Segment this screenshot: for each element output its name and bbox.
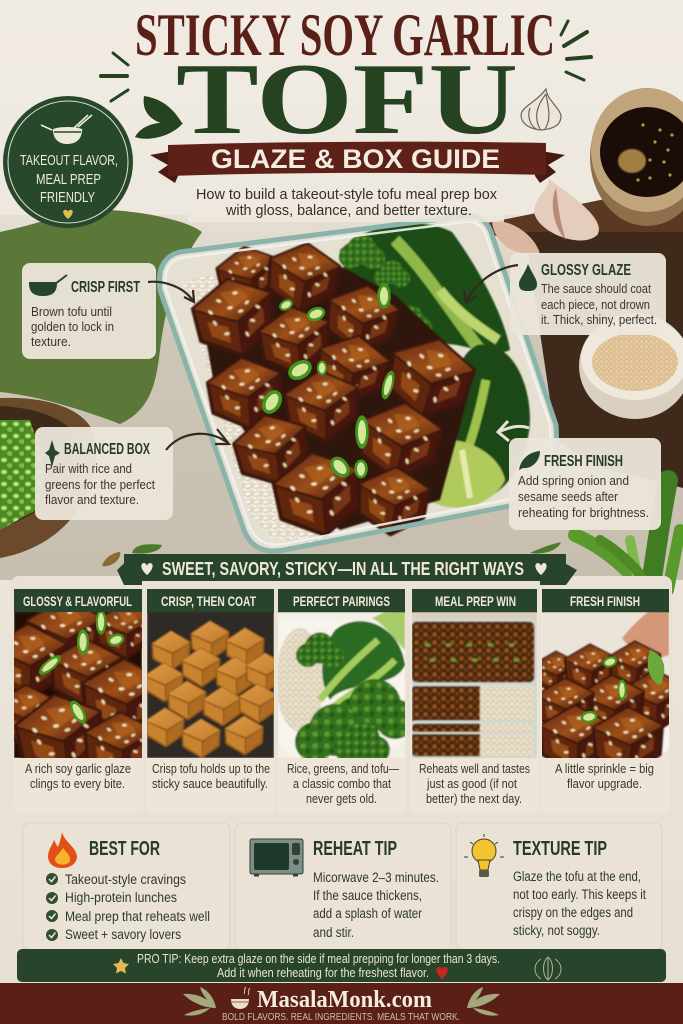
meal prep container	[159, 216, 556, 551]
callout: fresh finish	[509, 438, 661, 530]
callout: glossy glaze	[510, 253, 666, 335]
icon: whisk	[535, 957, 561, 980]
spring onions	[260, 285, 395, 479]
card: crisp then coat	[147, 589, 274, 790]
icon: yellow heart	[63, 210, 73, 219]
icon: red heart	[436, 967, 448, 979]
panel: texture tip: sticky, not soggy.	[513, 923, 600, 938]
icon: drop	[519, 264, 537, 291]
card: perfect pairings: a classic combo that	[293, 776, 391, 791]
panel: reheat tip: and stir.	[313, 925, 354, 940]
card: glossy and flavorful	[14, 589, 142, 790]
footer band: MasalaMonk.com	[257, 987, 432, 1013]
panel: reheat tip: If the sauce thickens,	[313, 888, 422, 903]
callout: fresh finish: sesame seeds after	[518, 489, 619, 504]
card: meal prep win	[410, 589, 538, 812]
arrow: glossy glaze	[464, 265, 518, 302]
checklist: Meal prep that reheats well	[65, 909, 210, 924]
panel: texture tip: not too early. This keeps it	[513, 887, 646, 902]
arrow: balanced box	[166, 429, 229, 450]
callout: crisp first: CRISP FIRST	[71, 279, 140, 296]
card: meal prep win: MEAL PREP WIN	[435, 593, 516, 609]
card: crisp then coat: Crisp tofu holds up to the	[152, 761, 270, 776]
badge: takeout flavor: TAKEOUT FLAVOR,	[20, 153, 118, 169]
photo: sprinkling onions	[542, 612, 669, 758]
card: glossy and flavorful: GLOSSY & FLAVORFUL	[23, 593, 132, 609]
callout: balanced box	[35, 427, 173, 520]
glass rim	[159, 216, 556, 551]
checklist: Sweet + savory lovers	[65, 927, 181, 942]
card: crisp then coat: CRISP, THEN COAT	[161, 593, 256, 609]
checklist: Takeout-style cravings	[65, 872, 186, 887]
card: meal prep win: Reheats well and tastes	[419, 761, 530, 776]
background: wooden board	[472, 188, 683, 488]
callout: crisp first: golden to lock in	[31, 319, 114, 334]
soy sauce bowl	[590, 88, 683, 226]
subtitle: with gloss, balance, and better texture.	[225, 203, 472, 219]
callout: glossy glaze: each piece, not drown	[541, 297, 650, 312]
icon: light bulb	[464, 834, 504, 877]
card: fresh finish: flavor upgrade.	[567, 776, 642, 791]
callout: glossy glaze: The sauce should coat	[541, 281, 651, 296]
callout: glossy glaze: it. Thick, shiny, perfect.	[541, 312, 657, 327]
icon: pan	[30, 275, 67, 295]
icon: microwave	[250, 839, 303, 876]
callout: glossy glaze: GLOSSY GLAZE	[541, 262, 631, 279]
callout: balanced box: flavor and texture.	[45, 492, 139, 507]
icon: sparkle	[45, 440, 60, 467]
callout: fresh finish: Add spring onion and	[518, 473, 629, 488]
container base	[159, 216, 556, 551]
icon: leaf	[519, 451, 540, 470]
ribbon: sweet savory sticky	[117, 554, 577, 585]
icon: bowl with chopsticks	[41, 115, 92, 144]
panel: best for	[23, 823, 230, 950]
badge: takeout flavor	[3, 96, 133, 228]
card: meal prep win: just as good (if not	[426, 776, 517, 791]
callout: crisp first	[22, 263, 156, 359]
background: counter top	[0, 215, 683, 580]
card: perfect pairings	[278, 589, 405, 806]
panel: texture tip: TEXTURE TIP	[513, 838, 607, 860]
pro tip bar	[17, 949, 666, 982]
photo: glazed tofu	[14, 612, 142, 758]
arrow: fresh finish	[498, 421, 529, 441]
checklist: High-protein lunches	[65, 890, 177, 905]
panel: reheat tip: add a splash of water	[313, 906, 422, 921]
panel: reheat tip	[235, 823, 451, 950]
garlic bulbs	[492, 178, 599, 254]
icon: flame	[48, 832, 77, 868]
badge: takeout flavor: MEAL PREP	[36, 172, 101, 188]
rice	[182, 255, 340, 544]
card: meal prep win: better) the next day.	[426, 791, 522, 806]
card: glossy and flavorful: clings to every bite.	[30, 776, 125, 791]
panel: texture tip: Glaze the tofu at the end,	[513, 869, 641, 884]
panel: best for: BEST FOR	[89, 838, 160, 860]
callout: fresh finish: reheating for brightness.	[518, 505, 649, 520]
panel: reheat tip: REHEAT TIP	[313, 838, 397, 860]
callout: fresh finish: FRESH FINISH	[544, 453, 623, 470]
photo: crisp tofu in pan	[145, 612, 284, 758]
pro tip bar: PRO TIP: Keep extra glaze on the side if meal prepping for longer than 3 days.	[137, 951, 500, 966]
callout: crisp first: texture.	[31, 334, 71, 349]
card: fresh finish	[542, 589, 669, 790]
panel: texture tip	[456, 823, 662, 950]
footer band: BOLD FLAVORS. REAL INGREDIENTS. MEALS THAT WORK.	[222, 1012, 460, 1023]
icon: leaf sprig left	[183, 987, 216, 1016]
lower bok choy	[423, 345, 530, 508]
bowl of spring onions	[0, 398, 96, 558]
photo: rice and greens	[278, 612, 405, 758]
card: fresh finish: FRESH FINISH	[570, 593, 640, 609]
upper greens	[339, 223, 510, 353]
callout: crisp first: Brown tofu until	[31, 304, 112, 319]
background: green napkin	[0, 210, 202, 424]
callout: balanced box: Pair with rice and	[45, 461, 132, 476]
footer band	[0, 983, 683, 1024]
card: perfect pairings: never gets old.	[306, 791, 377, 806]
tofu cubes	[190, 240, 478, 540]
callout: balanced box: greens for the perfect	[45, 477, 155, 492]
callout: balanced box: BALANCED BOX	[64, 441, 150, 458]
card: fresh finish: A little sprinkle = big	[555, 761, 654, 776]
photo: stacked containers	[410, 612, 537, 758]
card: crisp then coat: sticky sauce beautifully.	[152, 776, 268, 791]
pro tip bar: Add it when reheating for the freshest flavor.	[217, 965, 429, 980]
sesame bowl	[579, 313, 683, 419]
icon: leaves	[135, 96, 183, 139]
badge: takeout flavor: FRIENDLY	[40, 190, 95, 206]
card: perfect pairings: PERFECT PAIRINGS	[293, 593, 390, 609]
card: glossy and flavorful: A rich soy garlic glaze	[25, 761, 131, 776]
icon: garlic outline	[521, 89, 561, 130]
ribbon: sweet savory sticky: SWEET, SAVORY, STICKY—IN ALL THE RIGHT WAYS	[162, 558, 524, 579]
panel: five photo cards	[0, 576, 683, 814]
ribbon: glaze and box guide	[150, 142, 565, 183]
ribbon: glaze and box guide: GLAZE & BOX GUIDE	[211, 144, 500, 174]
icon: leaf sprig right	[467, 987, 500, 1016]
icon: star	[113, 958, 129, 974]
icon: bowl	[231, 987, 250, 1009]
panel: texture tip: crispy on the edges and	[513, 905, 633, 920]
spray marks	[101, 21, 591, 101]
icon: hearts	[141, 563, 547, 575]
small leaves by ribbon	[102, 542, 561, 566]
checklist	[46, 872, 210, 942]
background greens	[575, 480, 680, 610]
arrow: crisp first	[148, 282, 194, 302]
card: perfect pairings: Rice, greens, and tofu—	[287, 761, 399, 776]
subtitle	[188, 183, 504, 222]
subtitle: How to build a takeout-style tofu meal prep box	[196, 187, 498, 203]
title: tofu: TOFU	[176, 43, 518, 156]
panel: reheat tip: Micorwave 2–3 minutes.	[313, 870, 439, 885]
